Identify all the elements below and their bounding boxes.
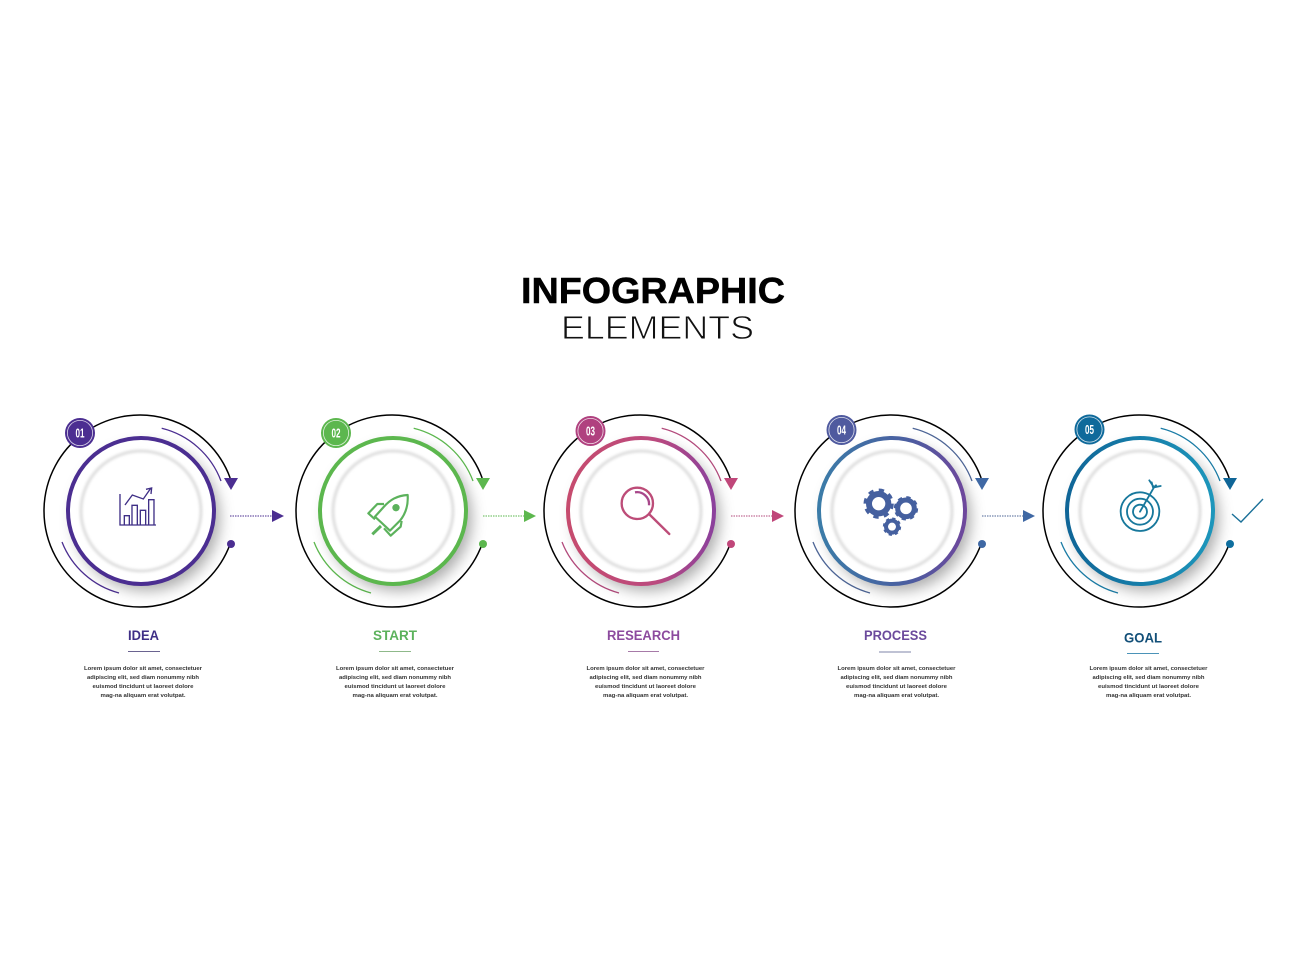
arrow to step 5 [982, 510, 1035, 522]
arrow to step 3 [483, 510, 536, 522]
icon: magnifier [622, 488, 669, 534]
badge 01 [65, 418, 95, 448]
panel: step 3 research [544, 415, 784, 699]
badge 03: 03 [586, 424, 595, 438]
circle diagram 4 [795, 415, 989, 607]
text: goal description [1090, 666, 1208, 699]
icon: target [1121, 480, 1161, 531]
badge 05: 05 [1085, 423, 1094, 437]
panel: step 5 goal [1043, 414, 1263, 699]
heading: START: START [373, 628, 418, 643]
circle diagram 1 [44, 415, 238, 607]
arrow to step 2 [230, 510, 284, 522]
text: goal description: adipiscing elit, sed diam nonummy nibh [1092, 675, 1205, 681]
badge 05 [1074, 414, 1104, 444]
text: process description: Lorem ipsum dolor sit amet, consectetuer [838, 666, 956, 672]
text: start description: adipiscing elit, sed diam nonummy nibh [339, 675, 452, 681]
text: idea description: adipiscing elit, sed diam nonummy nibh [87, 675, 200, 681]
text: start description [336, 666, 455, 699]
text: process description [838, 666, 956, 699]
text: goal description: mag-na aliquam erat volutpat. [1106, 693, 1191, 699]
badge 01: 01 [76, 426, 85, 440]
text: idea description: Lorem ipsum dolor sit amet, consectetuer [84, 666, 203, 672]
text: process description: adipiscing elit, sed diam nonummy nibh [840, 675, 953, 681]
text: idea description: mag-na aliquam erat volutpat. [100, 693, 186, 699]
heading: IDEA: IDEA [128, 628, 159, 643]
text: goal description: euismod tincidunt ut laoreet dolore [1098, 684, 1199, 690]
icon: gears [865, 490, 917, 535]
text: research description: mag-na aliquam erat volutpat. [603, 693, 688, 699]
circle diagram 2 [296, 415, 490, 607]
text: research description: euismod tincidunt ut laoreet dolore [595, 684, 696, 690]
circle diagram 5 [1043, 415, 1237, 607]
text: idea description [84, 666, 203, 699]
badge 02 [321, 418, 351, 448]
text: research description: adipiscing elit, sed diam nonummy nibh [590, 675, 702, 681]
heading: GOAL: GOAL [1124, 630, 1162, 646]
text: idea description: euismod tincidunt ut laoreet dolore [92, 684, 194, 690]
icon: rocket [368, 495, 408, 536]
title: INFOGRAPHIC [521, 270, 785, 311]
text: start description: euismod tincidunt ut laoreet dolore [344, 684, 446, 690]
panel: step 4 process [795, 415, 1035, 699]
title [521, 270, 785, 347]
badge 04: 04 [837, 424, 846, 438]
text: goal description: Lorem ipsum dolor sit amet, consectetuer [1090, 666, 1208, 672]
badge 03 [576, 416, 606, 446]
heading: PROCESS: PROCESS [864, 628, 927, 643]
badge 04 [826, 415, 856, 445]
panel: step 1 idea [44, 415, 284, 699]
circle diagram 3 [544, 415, 738, 607]
text: process description: mag-na aliquam erat volutpat. [854, 693, 939, 699]
text: research description: Lorem ipsum dolor sit amet, consectetuer [586, 666, 705, 672]
icon: check mark [1232, 499, 1263, 522]
text: process description: euismod tincidunt ut laoreet dolore [846, 684, 947, 690]
title: ELEMENTS [561, 310, 754, 347]
panel: step 2 start [296, 415, 536, 699]
heading: RESEARCH: RESEARCH [607, 628, 680, 643]
icon: bar chart [120, 488, 156, 525]
text: start description: mag-na aliquam erat volutpat. [352, 693, 438, 699]
arrow to step 4 [731, 510, 784, 522]
badge 02: 02 [332, 426, 341, 440]
text: research description [586, 666, 705, 699]
text: start description: Lorem ipsum dolor sit amet, consectetuer [336, 666, 455, 672]
